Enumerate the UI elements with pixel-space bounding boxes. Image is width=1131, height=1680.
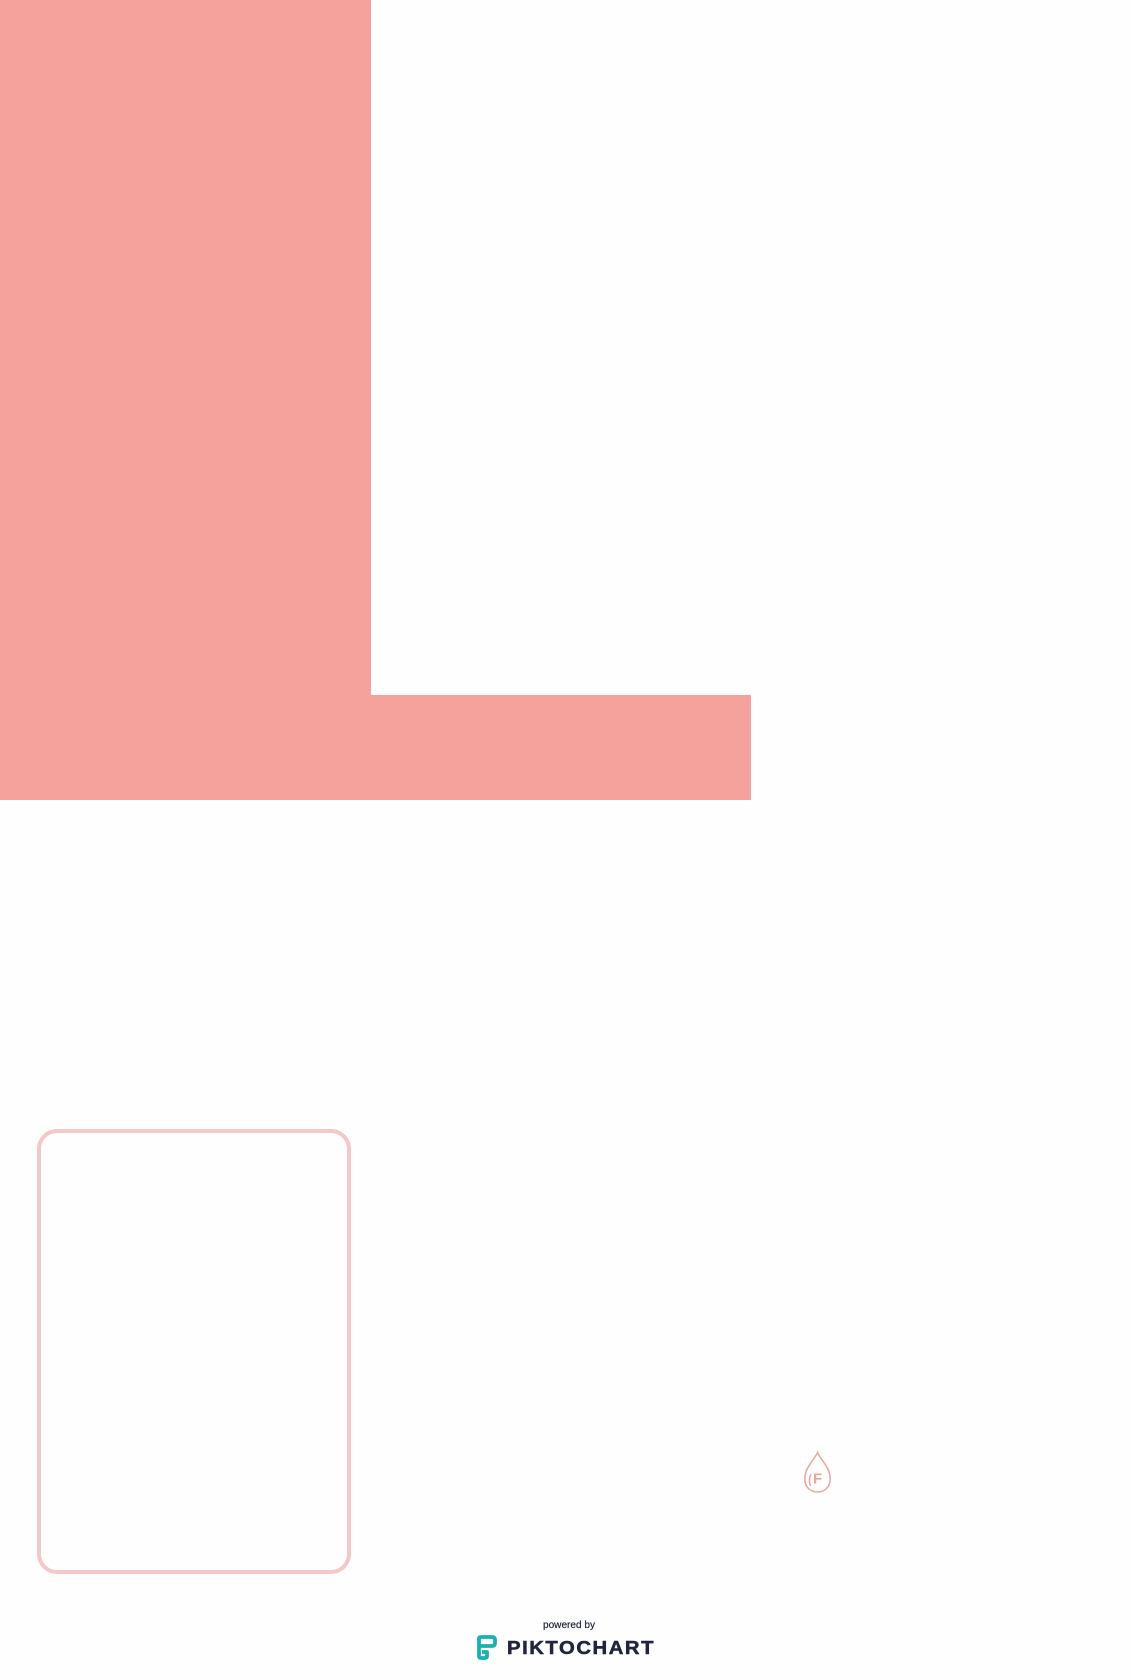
text: powered by: powered by [543, 1619, 596, 1631]
panel: pink left column [0, 0, 371, 800]
icon: water drop with letter F [804, 1450, 831, 1493]
icon: Piktochart logo [479, 1637, 495, 1658]
panel: pink horizontal band [371, 695, 751, 800]
text: PIKTOCHART wordmark: PIKTOCHART [507, 1637, 655, 1658]
panel: rounded outline card [37, 1129, 351, 1574]
footer: powered by Piktochart [477, 1619, 655, 1660]
icon: water drop with letter F: F [813, 1470, 822, 1488]
